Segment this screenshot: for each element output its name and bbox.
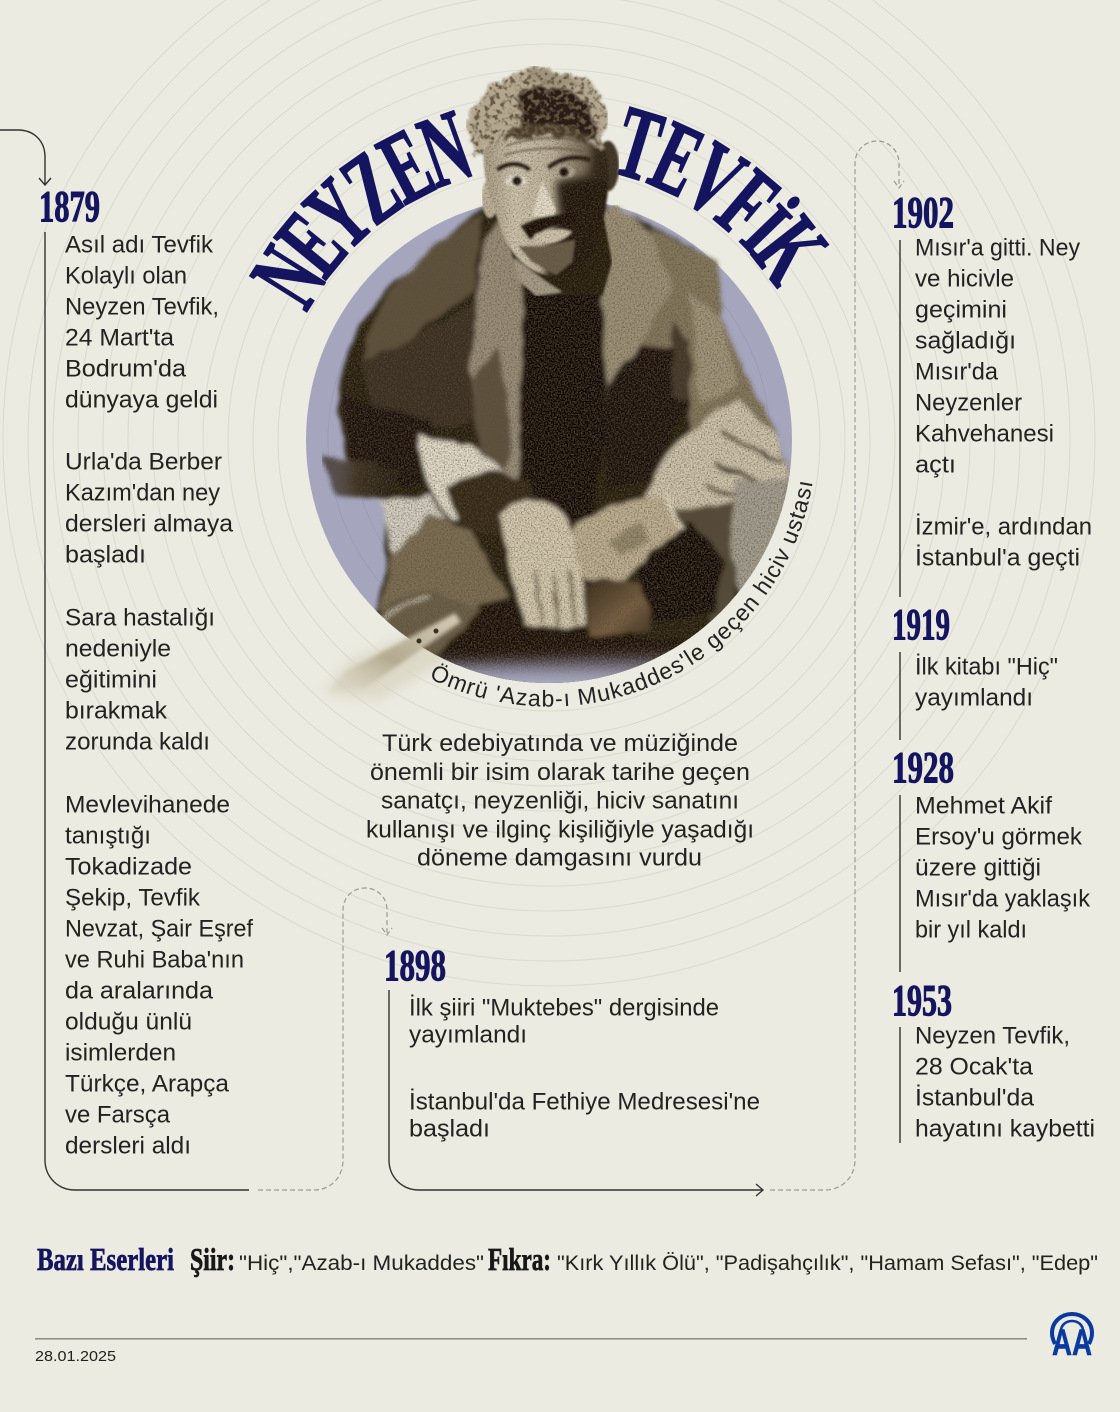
text block 1902: İstanbul'a geçti <box>915 545 1080 572</box>
title: Neyzen <box>229 89 485 325</box>
text block 1879: Türkçe, Arapça <box>65 1071 230 1098</box>
text block 1879: olduğu ünlü <box>65 1009 192 1036</box>
neck <box>508 200 612 296</box>
text block 1902: Mısır'da <box>915 359 999 386</box>
text block 1902: sağladığı <box>915 328 1016 355</box>
text block 1879: tanıştığı <box>65 823 151 850</box>
timeline line 1928 <box>899 795 901 972</box>
text block 1879: Tokadizade <box>65 854 192 881</box>
text block 1879: dersleri almaya <box>65 511 234 538</box>
text block 1879: ve Ruhi Baba'nın <box>65 947 244 974</box>
text block 1902: Mısır'a gitti. Ney <box>915 235 1080 262</box>
text block 1919: yayımlandı <box>915 685 1033 712</box>
text block 1902: İzmir'e, ardından <box>915 514 1092 541</box>
AA logo <box>1052 1314 1092 1363</box>
text block 1898: başladı <box>409 1116 490 1143</box>
title: Tevfik: E <box>635 99 719 219</box>
works heading: Bazı Eserleri <box>37 1241 174 1277</box>
text block 1879: nedeniyle <box>65 636 171 663</box>
text block 1902: Kahvehanesi <box>915 421 1054 448</box>
year 1898: 1898 <box>384 941 446 990</box>
text block 1898 <box>409 995 760 1143</box>
text block 1928 <box>915 793 1091 944</box>
text block 1879: Neyzen Tevfik, <box>65 294 219 321</box>
timeline line: 1879 to 1898 <box>45 232 249 1190</box>
text block 1879: dersleri aldı <box>65 1133 191 1160</box>
text block 1928: Mısır'da yaklaşık <box>915 886 1091 913</box>
text block 1902: açtı <box>915 452 956 479</box>
timeline line 1919 <box>899 652 901 740</box>
head with ears <box>482 131 619 276</box>
text block 1953: hayatını kaybetti <box>915 1116 1095 1143</box>
timeline line 1953 <box>899 1027 901 1143</box>
text block 1879: Nevzat, Şair Eşref <box>65 916 253 943</box>
text block 1879: Sara hastalığı <box>65 605 215 632</box>
text block 1953: 28 Ocak'ta <box>915 1054 1034 1081</box>
title: Tevfik: İ <box>725 188 808 270</box>
text block 1902: Neyzenler <box>915 390 1022 417</box>
text block 1879: Kolaylı olan <box>65 263 187 290</box>
text block 1928: Ersoy'u görmek <box>915 824 1083 851</box>
title: Tevfik: T <box>603 85 674 205</box>
text block 1879: başladı <box>65 542 146 569</box>
intro paragraph: Türk edebiyatında ve müziğinde <box>382 730 738 757</box>
year 1953: 1953 <box>892 976 952 1025</box>
year 1919: 1919 <box>892 600 950 649</box>
text block 1879 <box>65 232 253 1160</box>
works strip <box>37 1241 1098 1277</box>
intro paragraph: sanatçı, neyzenliği, hiciv sanatını <box>381 788 739 814</box>
text block 1879: Mevlevihanede <box>65 792 230 819</box>
body and clothing <box>322 205 792 700</box>
text block 1879: Urla'da Berber <box>65 449 222 476</box>
anecdote works: "Kırk Yıllık Ölü", "Padişahçılık", "Hamam Sefası", "Edep" <box>557 1252 1098 1275</box>
lavender portrait circle <box>306 197 792 683</box>
dashed connector to 1902 <box>770 141 904 1190</box>
text block 1879: 24 Mart'ta <box>65 325 175 352</box>
intro paragraph: döneme damgasını vurdu <box>417 844 702 872</box>
date: 28.01.2025 <box>35 1348 116 1365</box>
timeline line: 1898 to 1902 <box>389 990 763 1196</box>
title: Tevfik: F <box>697 149 798 259</box>
title: Tevfik: V <box>666 120 763 239</box>
text block 1879: Asıl adı Tevfik <box>65 232 214 259</box>
text block 1879: ve Farsça <box>65 1102 171 1129</box>
text block 1953: İstanbul'da <box>915 1085 1035 1112</box>
portrait of Neyzen Tevfik <box>322 66 792 700</box>
curly hair <box>466 66 608 160</box>
text block 1928: Mehmet Akif <box>915 793 1052 820</box>
title: Neyzen: N <box>406 89 485 210</box>
text block 1879: dünyaya geldi <box>65 387 218 414</box>
title: Neyzen: E <box>363 107 450 226</box>
ney flute shadow <box>322 610 480 700</box>
intro paragraph: önemli bir isim olarak tarihe geçen <box>370 759 750 786</box>
intro paragraph: kullanışı ve ilginç kişiliğiyle yaşadığı <box>366 816 754 844</box>
intro paragraph <box>366 730 754 872</box>
title: Neyzen: Z <box>322 130 420 246</box>
poetry label: Şiir: <box>190 1241 235 1277</box>
text block 1879: Bodrum'da <box>65 356 187 383</box>
text block 1919 <box>915 654 1058 712</box>
text block 1898: İstanbul'da Fethiye Medresesi'ne <box>409 1089 760 1116</box>
text block 1953: Neyzen Tevfik, <box>915 1023 1070 1050</box>
text block 1879: Şekip, Tevfik <box>65 885 201 912</box>
text block 1898: İlk şiiri "Muktebes" dergisinde <box>409 995 719 1022</box>
text block 1928: bir yıl kaldı <box>915 917 1027 944</box>
text block 1928: üzere gittiği <box>915 855 1041 882</box>
title: Neyzen: N <box>229 229 347 325</box>
text block 1953 <box>915 1023 1095 1143</box>
text block 1879: Kazım'dan ney <box>65 480 220 507</box>
anecdote label: Fıkra: <box>488 1241 551 1277</box>
curved tagline: Ömrü 'Azab-ı Mukaddes'le geçen hiciv ustası <box>432 482 812 707</box>
text block 1902 <box>915 235 1092 572</box>
text block 1902: ve hicivle <box>915 266 1014 293</box>
title: Neyzen: E <box>255 193 368 296</box>
text block 1919: İlk kitabı "Hiç" <box>915 654 1058 681</box>
poetry works: "Hiç","Azab-ı Mukaddes" <box>239 1252 484 1275</box>
text block 1879: eğitimini <box>65 667 157 694</box>
AA logo: AA <box>1052 1322 1092 1363</box>
text block 1879: zorunda kaldı <box>65 729 210 756</box>
text block 1879: isimlerden <box>65 1040 176 1067</box>
text block 1902: geçimini <box>915 297 1007 324</box>
year 1928: 1928 <box>892 743 954 792</box>
text block 1879: da aralarında <box>65 978 214 1005</box>
title: Tevfik: K <box>733 197 850 302</box>
year 1879: 1879 <box>39 182 100 231</box>
ney flute <box>327 613 461 693</box>
year 1902: 1902 <box>892 188 954 237</box>
title: Tevfik <box>603 85 850 302</box>
text block 1898: yayımlandı <box>409 1022 527 1049</box>
timeline arrow: entry to 1879 <box>0 130 51 185</box>
text block 1879: bırakmak <box>65 698 168 725</box>
title: Neyzen: Y <box>284 158 393 271</box>
lavender fade at circle bottom <box>437 648 674 683</box>
timeline line 1902 <box>899 240 901 597</box>
dashed connector to 1898 <box>258 888 392 1190</box>
